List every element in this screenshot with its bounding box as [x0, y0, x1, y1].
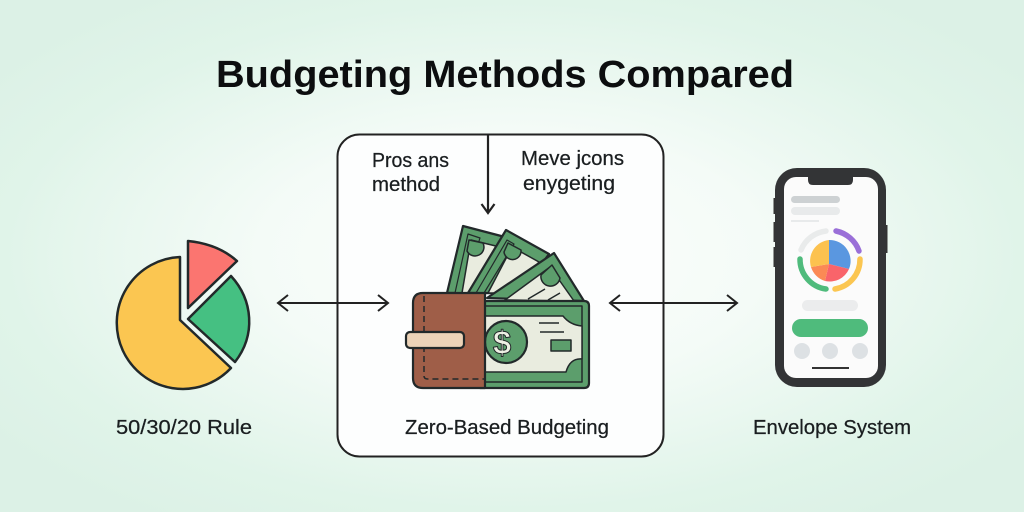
pill placeholder — [802, 300, 858, 311]
yellow slice — [117, 257, 231, 389]
text: icons note: Meve jcons — [521, 148, 624, 170]
nav dots — [794, 343, 868, 359]
text: pros note: method — [372, 174, 440, 196]
icon: front bill — [480, 301, 589, 388]
icon: pie chart — [117, 241, 249, 389]
phone screen — [784, 177, 878, 378]
phone side buttons — [775, 198, 886, 267]
pie slices — [810, 240, 851, 282]
icon: wallet clasp — [406, 332, 464, 348]
text: icons note: enygeting — [523, 173, 615, 195]
text placeholders — [791, 196, 840, 222]
green slice — [188, 276, 249, 362]
phone body — [775, 168, 886, 387]
label: zero-based budgeting: Zero-Based Budgeting — [405, 417, 609, 439]
arrow: down to wallet — [482, 135, 494, 213]
icon: fanned bills — [447, 226, 584, 301]
icon: wallet with cash — [406, 226, 589, 388]
text: pros note: Pros ans — [372, 150, 449, 172]
text: icons note — [521, 148, 624, 195]
phone notch — [808, 176, 853, 185]
home bar — [812, 367, 849, 369]
icon: smartphone — [775, 168, 886, 387]
green button — [792, 319, 868, 337]
label: 50/30/20 rule: 50/30/20 Rule — [116, 417, 252, 439]
title: Budgeting Methods Compared — [216, 54, 794, 96]
icon: wallet body — [413, 293, 485, 388]
donut ring — [800, 231, 860, 289]
panel: zero-based budgeting — [338, 134, 664, 456]
red slice — [188, 241, 237, 308]
arrow: pie to wallet — [278, 295, 388, 311]
text: pros note — [372, 150, 449, 196]
text: dollar sign: $ — [493, 324, 511, 361]
arrow: wallet to phone — [610, 295, 737, 311]
label: envelope system: Envelope System — [753, 417, 911, 439]
